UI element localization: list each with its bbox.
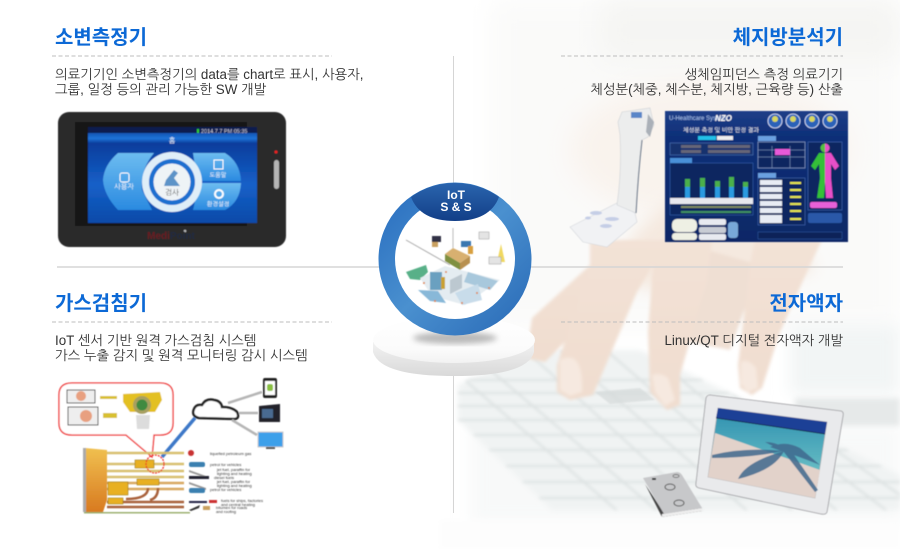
- legend items: jet fuel, paraffin for: [216, 467, 251, 472]
- icon: monitor: [258, 432, 283, 449]
- device: body composition scale: [570, 108, 654, 247]
- legend items: and central heating: [221, 502, 255, 507]
- legend items: fuels for ships, factories: [221, 498, 263, 503]
- panel: body composition software screen: 체성분 측정 및 비만 판정 결과: [683, 126, 759, 134]
- icon: cloud: [193, 400, 238, 419]
- distillation tower: [85, 448, 107, 512]
- legend items: lighting and heating: [217, 471, 252, 476]
- legend items: [188, 450, 263, 514]
- legend items: bitumen for roads: [216, 505, 247, 510]
- icon: smartphone: [263, 378, 277, 398]
- device: remote control: [643, 472, 702, 517]
- background: faded hand on keyboard: [440, 0, 900, 549]
- heading: 소변측정기: 소변측정기: [55, 26, 147, 49]
- device: urine analyzer tablet: MediPoint: [147, 231, 196, 242]
- text: 소변측정기 description: 그룹, 일정 등의 관리 가능한 SW 개발: [55, 82, 267, 97]
- ring: [387, 191, 523, 327]
- panel: body composition software screen: NZO: [715, 114, 733, 123]
- legend items: lighting and heating: [217, 483, 252, 488]
- pedestal: [373, 317, 535, 376]
- icon: server: [259, 404, 280, 422]
- panel: body composition software screen: U-Healthcare System: [669, 116, 726, 122]
- panel: body composition software screen: [665, 111, 848, 242]
- divider lines: [57, 56, 843, 513]
- center emblem: IoT S & S: [373, 183, 535, 376]
- cap label: IoT: [447, 188, 466, 202]
- hand fingers: [526, 240, 822, 410]
- heading: 체지방분석기: 체지방분석기: [733, 26, 843, 49]
- device: urine analyzer tablet: 홈: [169, 137, 176, 145]
- legend items: petrol for vehicles: [210, 462, 241, 467]
- legend items: jet fuel, paraffin for: [216, 479, 251, 484]
- device: urine analyzer tablet: 사용자: [114, 183, 134, 191]
- text: 가스검침기 description: IoT 센서 기반 원격 가스검침 시스템: [55, 333, 256, 348]
- text: 전자액자 description: Linux/QT 디지털 전자액자 개발: [664, 333, 843, 348]
- IoT smart building diagram: [406, 228, 505, 305]
- text: 체지방분석기 description: 체성분(체중, 체수분, 체지방, 근육량 등) 산출: [590, 82, 843, 97]
- callout: detector close-up: [59, 383, 173, 457]
- device: urine analyzer tablet: 검사: [165, 188, 179, 197]
- device: urine analyzer tablet: 환경설정: [207, 200, 229, 208]
- legend items: petrol for vehicles: [210, 487, 241, 492]
- text: 체지방분석기 description: 생체임피던스 측정 의료기기: [684, 67, 843, 82]
- heading: 가스검침기: 가스검침기: [55, 292, 147, 315]
- legend items: and roofing: [216, 509, 236, 514]
- device: urine analyzer tablet: [58, 112, 286, 247]
- top cap: [411, 183, 499, 221]
- text: 소변측정기 description: 의료기기인 소변측정기의 data를 chart로 표시, 사용자,: [55, 67, 363, 82]
- device: digital photo frame: [696, 395, 843, 514]
- cap label: S & S: [440, 200, 472, 214]
- device: urine analyzer tablet: 2014.7.7 PM 05:35: [201, 129, 247, 135]
- heading: 전자액자: 전자액자: [769, 292, 843, 315]
- legend items: liquefied petroleum gas: [210, 451, 251, 456]
- legend items: diesel fuels: [214, 475, 234, 480]
- device: urine analyzer tablet: 도움말: [210, 172, 227, 179]
- text: 가스검침기 description: 가스 누출 감지 및 원격 모니터링 감시 시스템: [55, 348, 308, 363]
- diagram: gas detection refinery system: [59, 378, 283, 514]
- network links: [228, 392, 262, 435]
